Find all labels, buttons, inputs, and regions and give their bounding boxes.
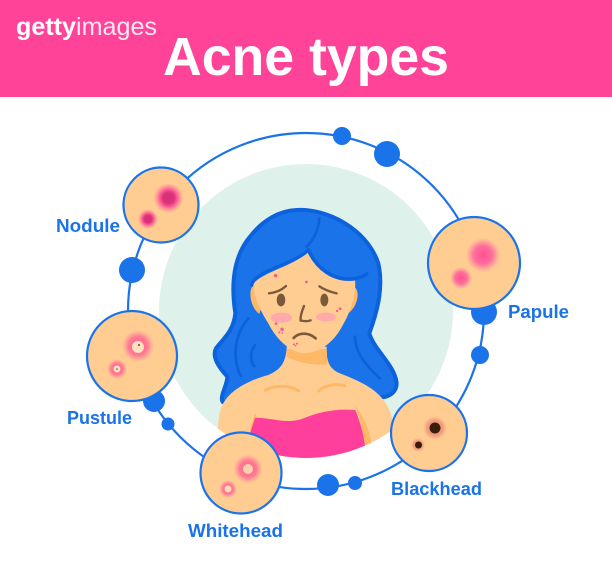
label: whitehead: Whitehead <box>188 521 283 541</box>
mouth <box>294 334 316 338</box>
eyebrows <box>269 286 337 338</box>
body <box>218 347 393 467</box>
label: nodule: Nodule <box>56 216 120 236</box>
nose <box>301 306 311 321</box>
ears <box>250 286 260 314</box>
label: papule: Papule <box>508 302 569 322</box>
orbit ring <box>128 133 484 489</box>
background circle <box>159 164 453 458</box>
hair <box>215 210 397 407</box>
panel: pustule <box>87 311 177 401</box>
header banner <box>0 0 612 97</box>
panel: blackhead <box>391 395 467 471</box>
orbit dots <box>119 127 497 496</box>
underarm folds <box>250 413 257 433</box>
label: pustule: Pustule <box>67 408 132 428</box>
pimples <box>274 274 341 346</box>
woman illustration <box>215 210 397 467</box>
panel: whitehead <box>200 432 282 514</box>
panel: nodule <box>124 168 198 242</box>
watermark logo: gettyimages <box>16 13 157 41</box>
panel: papule <box>428 217 520 309</box>
title: Acne types <box>163 27 449 87</box>
hair strands <box>236 218 380 378</box>
collar bones <box>265 385 345 391</box>
neck shadow <box>287 349 327 365</box>
eyes <box>277 294 285 306</box>
cheeks <box>271 313 292 323</box>
fringe edge <box>308 250 367 279</box>
label: blackhead: Blackhead <box>391 479 482 499</box>
dress <box>250 410 365 458</box>
face <box>253 250 355 353</box>
